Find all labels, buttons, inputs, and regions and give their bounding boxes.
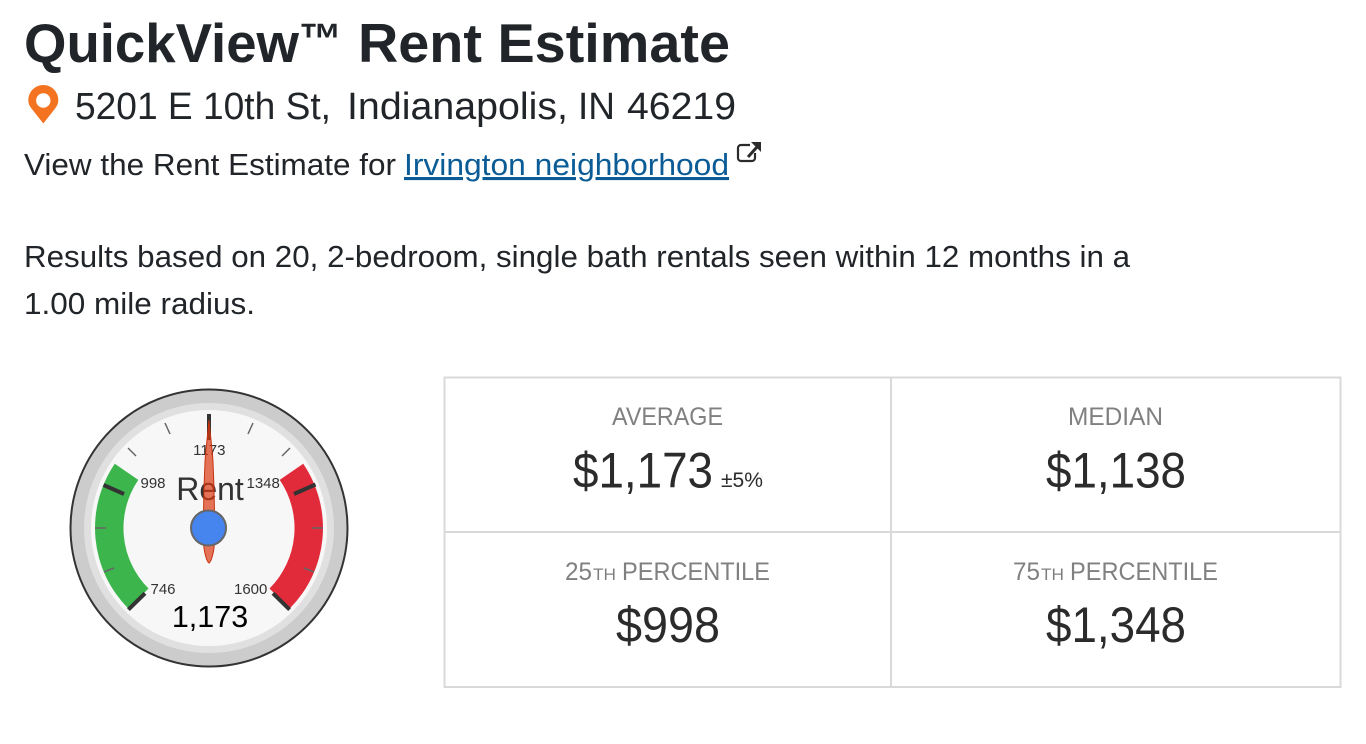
cell: 75th percentile: PERCENTILE	[1070, 558, 1218, 586]
cell: average: ±5%	[721, 469, 763, 492]
title: QuickView	[24, 12, 299, 74]
cell: median	[1046, 403, 1186, 498]
results description: Results based on 20, 2-bedroom, single bath rentals seen within 12 months in a	[24, 239, 1131, 274]
cell: 75th percentile: TH	[1041, 565, 1064, 584]
gauge value: 1,173	[172, 600, 248, 634]
table grid	[444, 377, 1340, 687]
gauge tick labels: 998	[140, 475, 166, 492]
gauge tick labels: 1600	[234, 581, 267, 598]
cell: 25th percentile: PERCENTILE	[622, 558, 770, 586]
gauge tick labels: 746	[150, 581, 176, 598]
cell: 25th percentile: $998	[616, 597, 720, 653]
gauge dial	[70, 390, 348, 666]
icon: external link	[738, 142, 761, 161]
green range arc	[95, 464, 148, 609]
address: IN	[578, 86, 615, 128]
results description: 1.00 mile radius.	[24, 286, 255, 321]
red range arc	[270, 464, 323, 609]
icon: orange map pin	[28, 85, 58, 124]
gauge needle	[191, 420, 226, 563]
cell: average	[573, 403, 763, 498]
minor ticks	[95, 423, 323, 572]
address	[75, 86, 736, 128]
cell: 25th percentile: 25	[565, 558, 592, 586]
cell: 75th percentile: $1,348	[1046, 597, 1186, 653]
cell: 25th percentile: TH	[593, 565, 616, 584]
cell: average: $1,173	[573, 442, 713, 498]
address: 5201 E 10th St,	[75, 86, 331, 128]
cell: median: MEDIAN	[1068, 403, 1163, 431]
gauge tick labels	[140, 442, 280, 598]
major ticks	[104, 414, 316, 610]
title	[24, 12, 730, 74]
title: ™	[299, 15, 342, 64]
address: Indianapolis,	[347, 86, 568, 128]
cell: 25th percentile	[565, 558, 770, 653]
cell: 75th percentile: 75	[1013, 558, 1040, 586]
neighborhood line	[24, 147, 729, 182]
cell: median: $1,138	[1046, 442, 1186, 498]
cell: 75th percentile	[1013, 558, 1218, 653]
results description	[24, 239, 1131, 321]
gauge tick labels: 1173	[193, 442, 225, 459]
neighborhood link: Irvington neighborhood	[404, 147, 729, 182]
neighborhood line: View the Rent Estimate for	[24, 147, 396, 182]
gauge title: Rent	[176, 471, 244, 507]
statistics table	[444, 377, 1340, 687]
address: 46219	[627, 86, 736, 128]
title: Rent Estimate	[358, 12, 730, 74]
cell: average: AVERAGE	[612, 403, 723, 431]
gauge tick labels: 1348	[246, 475, 280, 492]
rent gauge	[70, 390, 348, 666]
